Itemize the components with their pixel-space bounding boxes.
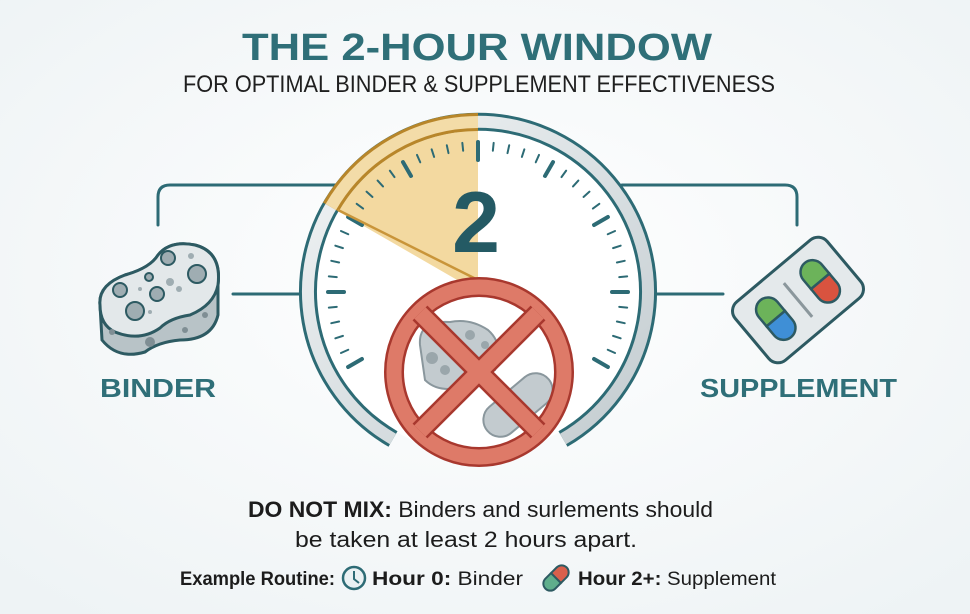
clock bbox=[308, 122, 648, 454]
icon: sponge (binder) bbox=[100, 244, 219, 354]
icon: sponge and capsule (grey) bbox=[420, 321, 560, 444]
subtitle: FOR OPTIMAL BINDER & SUPPLEMENT EFFECTIVENESS bbox=[183, 71, 775, 98]
icon: pill bbox=[540, 562, 572, 594]
warning text bbox=[248, 497, 713, 552]
example routine: Hour 2+: Supplement bbox=[578, 569, 777, 590]
icon: blister pack (supplement) bbox=[728, 232, 868, 368]
icon: clock bbox=[343, 567, 365, 589]
warning text: be taken at least 2 hours apart. bbox=[295, 527, 637, 552]
connector lines bbox=[158, 185, 797, 294]
title: THE 2-HOUR WINDOW bbox=[242, 27, 712, 69]
clock ring bbox=[308, 122, 648, 439]
sector edge bbox=[338, 210, 478, 280]
prohibition sign bbox=[394, 287, 564, 457]
ticks bbox=[328, 142, 628, 367]
example routine: Hour 0: Binder bbox=[372, 569, 524, 590]
big number 2: 2 bbox=[452, 175, 500, 271]
warning text: DO NOT MIX: Binders and surlements should bbox=[248, 497, 713, 522]
example routine bbox=[180, 562, 777, 594]
label: binder: BINDER bbox=[100, 373, 216, 403]
label: supplement: SUPPLEMENT bbox=[700, 373, 897, 403]
yellow sector bbox=[331, 122, 478, 292]
example routine: Example Routine: bbox=[180, 569, 335, 590]
